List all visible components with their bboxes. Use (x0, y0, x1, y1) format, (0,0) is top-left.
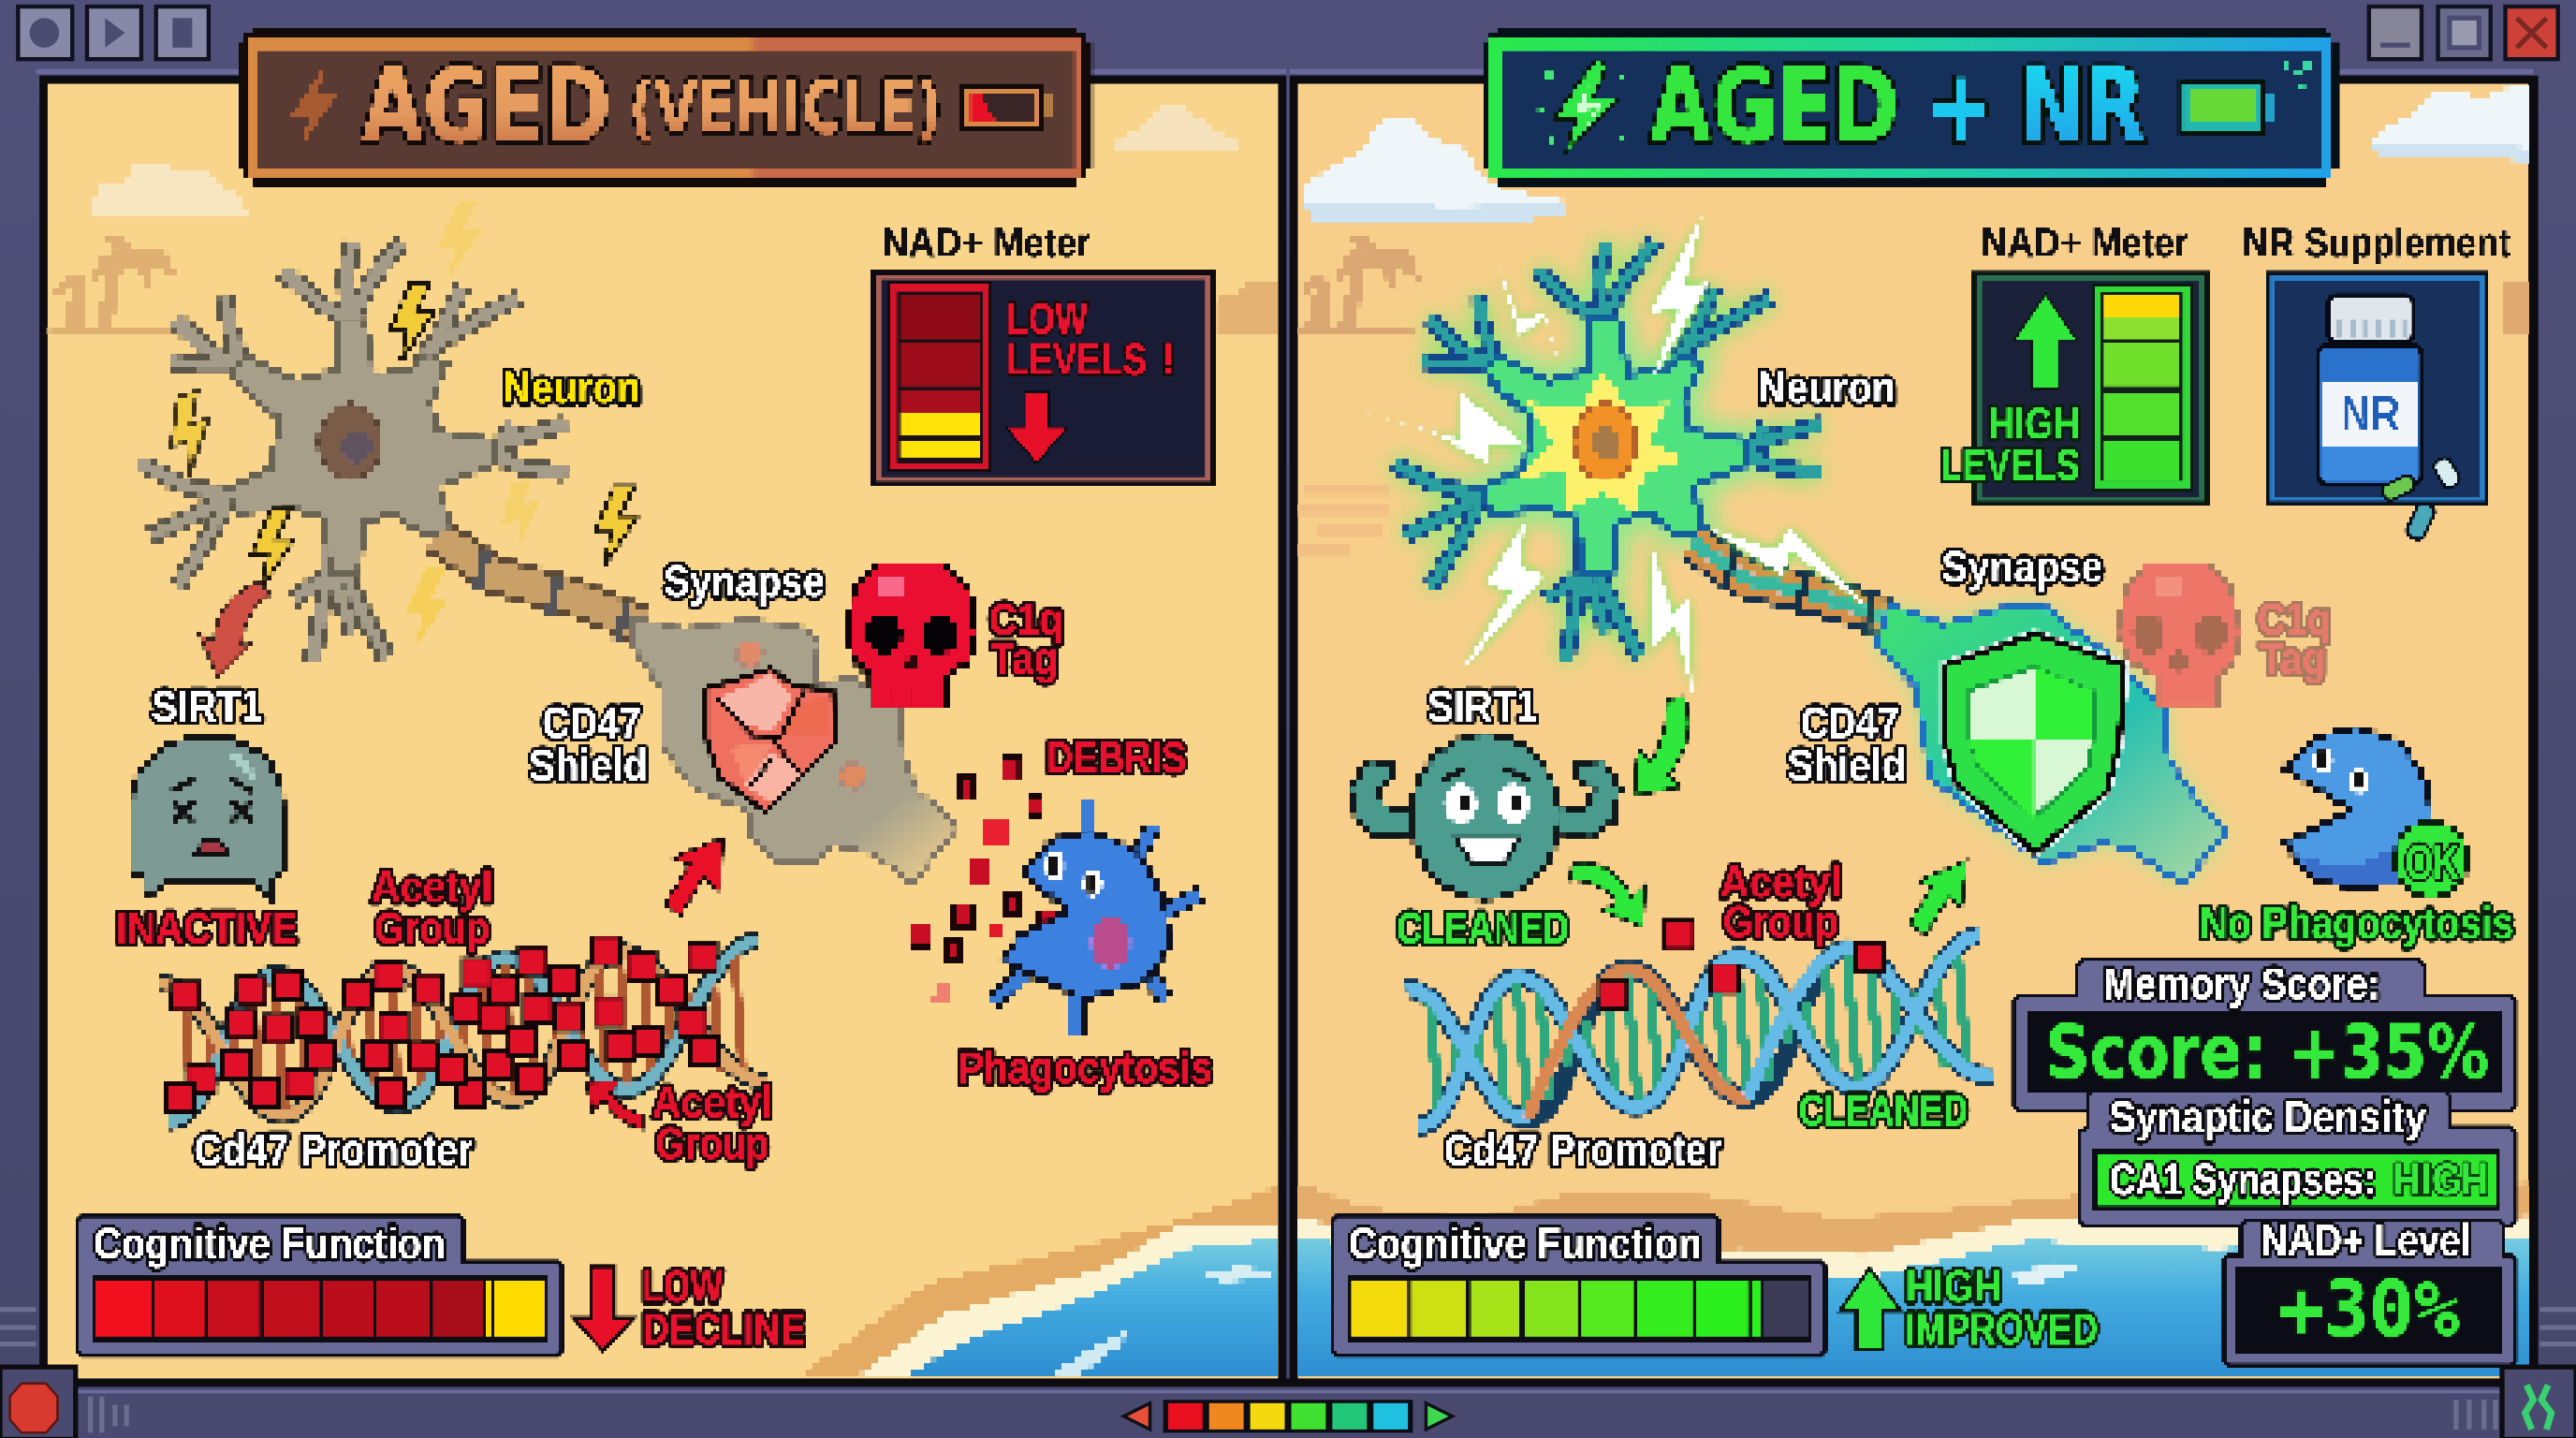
nucleus right (1573, 404, 1636, 479)
window controls right (2369, 7, 2558, 59)
microglia resting eyes (2313, 748, 2369, 794)
cognitive function panel right (1332, 1216, 1825, 1356)
nr supplement label: NR Supplement (2243, 220, 2510, 266)
energy bolts: white (1357, 217, 1873, 694)
icon: green circuit (2525, 1385, 2552, 1430)
icon: faded bolt (289, 66, 337, 144)
inactive label: INACTIVE (117, 903, 298, 953)
cd47 promoter label left: Cd47 Promoter (194, 1125, 473, 1175)
debris particles (912, 757, 1055, 1005)
dune right edge (1216, 285, 1278, 337)
high improved label: HIGH (1906, 1262, 2001, 1312)
arrow: improved (1840, 1269, 1901, 1349)
high improved label: IMPROVED (1906, 1305, 2098, 1355)
title banner: aged plus nr (1484, 26, 2338, 187)
panels and labels layer (77, 220, 2515, 1365)
c1q label faded: Tag (2259, 635, 2326, 684)
high levels text (1940, 400, 2080, 490)
cloud right 1 (1305, 118, 1567, 220)
arrow up green (1909, 861, 1967, 935)
cloud left 1 (94, 161, 246, 213)
icon: low battery (961, 82, 1051, 131)
high levels text: HIGH (1988, 400, 2080, 449)
pills (2380, 455, 2462, 541)
grip left (91, 1397, 126, 1432)
nad meter: low (871, 220, 1216, 486)
neuron: aged plus nr, energized (1393, 242, 1889, 661)
title banner: aged vehicle (238, 26, 1092, 187)
nad label right: NAD+ Meter (1982, 220, 2188, 266)
bottle label: NR (2341, 387, 2400, 442)
score value: Score: +35% (2045, 1009, 2489, 1095)
sirt1 happy blob body (1351, 734, 1620, 899)
icon: c1q skull (848, 564, 976, 708)
palm trees left (50, 233, 178, 337)
beach left (797, 1186, 1278, 1378)
button: maximize (2438, 7, 2491, 59)
meter bar right (2093, 285, 2191, 490)
icon: cd47 shield intact (1945, 634, 2124, 853)
microglia phagocytosis eyes (1045, 851, 1103, 897)
cd47 shield label right: CD47 (1801, 698, 1899, 748)
button: settings (18, 7, 72, 59)
nad level label: NAD+ Level (2261, 1216, 2471, 1266)
c1q tag label: C1q (989, 594, 1063, 644)
cognitive label left: Cognitive Function (94, 1219, 446, 1269)
soma right (1480, 320, 1747, 575)
c1q label faded: C1q (2258, 594, 2331, 644)
acetyl label lower (652, 1078, 772, 1168)
c1q tag label (989, 594, 1063, 684)
meter bar (889, 283, 990, 470)
levels word: LEVELS (1007, 335, 1147, 385)
icon: full battery (2178, 59, 2311, 135)
bottom status bar (0, 1310, 2576, 1438)
cd47 shield label (529, 698, 648, 791)
sirt1 sad blob body (131, 736, 283, 899)
arrow up meter (2014, 294, 2076, 389)
icon: red gem (10, 1384, 57, 1432)
cd47 shield label: CD47 (542, 698, 640, 748)
grip side right (2539, 1310, 2576, 1344)
heading text: AGED green: AGED (1649, 47, 1899, 166)
cognitive function panel left (77, 1216, 562, 1356)
soma (227, 320, 493, 575)
beach right (1298, 1183, 2528, 1378)
high levels text: LEVELS (1940, 440, 2080, 490)
cloud right 2 (2372, 87, 2528, 161)
nr supplement panel (2243, 220, 2510, 541)
nad meter: high (1940, 220, 2210, 506)
ca1 synapses label: CA1 Synapses: (2110, 1155, 2376, 1205)
acetyl label top: Acetyl (372, 862, 493, 912)
low decline label: LOW (642, 1262, 723, 1312)
dna: cleaned (1406, 935, 1992, 1128)
exclamation: ! (1160, 335, 1177, 385)
arrow: sirt1 to dna (1571, 863, 1645, 927)
cloud left 2 (1117, 104, 1240, 153)
microglia: phagocytosis body (994, 799, 1199, 1035)
dune right (2504, 285, 2528, 337)
cd47 shield label right: Shield (1788, 741, 1906, 791)
heading text: AGED: AGED (361, 47, 611, 166)
bar segments right (1352, 1280, 1808, 1336)
debris label: DEBRIS (1046, 733, 1186, 783)
axon right (1692, 542, 1889, 638)
icon: charged bolt (1538, 59, 1625, 154)
button: close (2506, 7, 2558, 59)
sirt1 label: SIRT1 (151, 682, 263, 731)
synaptic density panel (2080, 1091, 2515, 1225)
palm trees right (1299, 233, 1419, 337)
icon: faded c1q skull (2117, 564, 2241, 707)
nucleus (318, 404, 381, 479)
memory score panel (2014, 960, 2515, 1110)
c1q tag label: Tag (990, 635, 1058, 684)
acetyl label lower: Acetyl (652, 1078, 772, 1127)
acetyl label right (1720, 858, 1841, 946)
arrow up red (666, 838, 723, 916)
low decline label (642, 1262, 805, 1355)
arrow: neuron to sirt1 green (1634, 697, 1689, 795)
arrow to acetyl (587, 1081, 642, 1129)
cognitive label right: Cognitive Function (1349, 1219, 1702, 1269)
ok badge shape (2395, 822, 2467, 897)
microglia: resting body (2284, 727, 2467, 897)
free acetyl square (1666, 922, 1694, 949)
acetyl label top (372, 862, 493, 953)
synapse label right: Synapse (1942, 542, 2103, 592)
acetyl squares (166, 936, 720, 1112)
neuron label right: Neuron (1758, 363, 1895, 413)
button: play (87, 7, 141, 59)
acetyl label right: Acetyl (1720, 858, 1841, 907)
synapse: aged (633, 618, 958, 884)
memory label: Memory Score: (2103, 960, 2380, 1009)
heading text: vehicle: (VEHICLE) (629, 66, 942, 151)
cd47 shield label: Shield (529, 741, 648, 791)
nad level panel (2224, 1216, 2515, 1365)
neuron: aged, dull (139, 242, 640, 661)
dna: aged with acetyl (160, 936, 768, 1123)
grip right (2456, 1400, 2496, 1430)
neuron label: Neuron (503, 363, 640, 413)
cd47 shield label right (1788, 698, 1906, 791)
sirt1 label right: SIRT1 (1427, 682, 1538, 731)
low levels text: LOW (1007, 294, 1088, 344)
nad value: +30% (2278, 1265, 2460, 1355)
heading text: NR: NR (2019, 47, 2145, 166)
low decline label: DECLINE (642, 1305, 805, 1355)
icon: nr bottle (2318, 296, 2422, 485)
acetyl label lower: Group (655, 1119, 768, 1168)
acetyl label top: Group (374, 903, 490, 953)
c1q label faded (2258, 594, 2331, 684)
fine pixel art and titles layer (159, 26, 2369, 1129)
high improved label (1906, 1262, 2098, 1355)
nad label left: NAD+ Meter (882, 220, 1090, 266)
sirt1 happy face (1441, 769, 1531, 862)
glow (1393, 242, 1821, 661)
synapse: energized (1876, 605, 2226, 884)
arrow: neuron to sirt1 (198, 581, 270, 677)
color scale legend (1123, 1400, 1453, 1432)
icon: broken cd47 shield (707, 668, 835, 812)
acetyl remnants (1600, 943, 1884, 1007)
arrow down (1005, 391, 1068, 463)
button: minimize (2369, 7, 2422, 59)
ok badge text: OK (2405, 835, 2459, 890)
arrow: decline (574, 1267, 634, 1351)
energy bolts: aged (159, 200, 637, 647)
window controls left (18, 7, 209, 59)
cd47 promoter label right: Cd47 Promoter (1444, 1125, 1721, 1175)
panel: aged plus nr (1290, 69, 2539, 1387)
no phagocytosis label: No Phagocytosis (2200, 899, 2513, 948)
cleaned label dna: CLEANED (1799, 1086, 1969, 1136)
faint sand stripes (1299, 486, 1390, 553)
button: bell (156, 7, 209, 59)
panel: aged vehicle (37, 69, 1286, 1387)
acetyl label right: Group (1723, 897, 1838, 946)
synaptic label: Synaptic Density (2110, 1093, 2427, 1142)
synapse label: Synapse (664, 557, 825, 607)
bar segments (95, 1280, 544, 1336)
grip side left (0, 1310, 37, 1344)
sirt1 sad face (171, 779, 253, 855)
high value: HIGH (2393, 1155, 2489, 1205)
heading text: plus: + (1925, 47, 1995, 166)
cleaned label left: CLEANED (1397, 903, 1569, 953)
phagocytosis label: Phagocytosis (958, 1044, 1212, 1093)
axon (435, 534, 640, 640)
